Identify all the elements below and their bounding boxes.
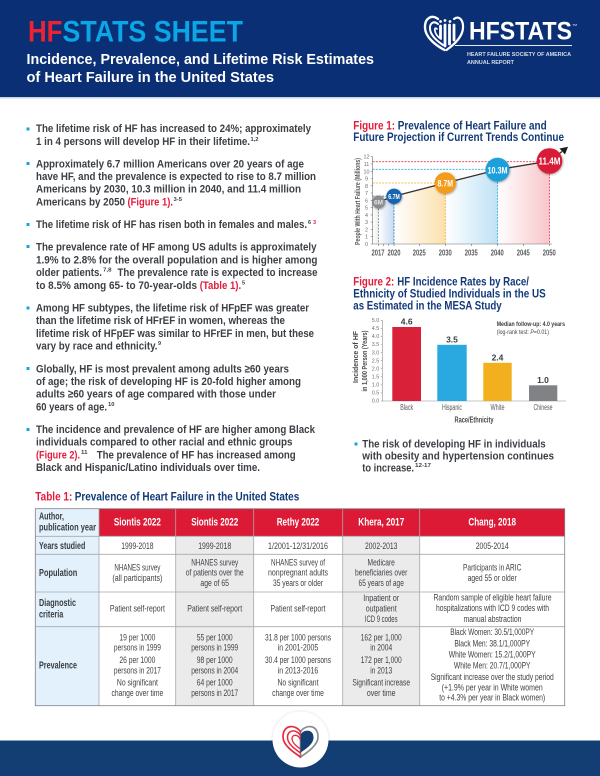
table header row: Rethy 2022 — [277, 517, 319, 529]
row: prevalence: 26 per 1000 — [119, 655, 155, 666]
dashed guide lines — [372, 162, 550, 244]
bullet: Black individuals: (Figure 2). — [36, 449, 80, 461]
bar: Black: 4.6 — [401, 316, 413, 326]
bullet: Black individuals — [26, 424, 316, 474]
table row labels: criteria — [39, 610, 64, 621]
chart note: Median follow-up: 4.0 years — [497, 321, 565, 328]
row: prevalence: 30.4 per 1000 persons — [265, 655, 331, 666]
x axis years: 2050 — [543, 249, 556, 258]
row: prevalence: Black Women: 30.5/1,000PY — [450, 627, 535, 638]
row: years studied: 2002-2013 — [365, 541, 397, 552]
bullet: globally — [26, 363, 301, 413]
row: population: beneficiaries over — [355, 568, 408, 579]
left column bullets — [26, 123, 318, 474]
bullet: lifetime risk: 1 in 4 persons will develop HF in their lifetime. — [36, 136, 250, 148]
logo caption — [467, 52, 571, 66]
bullet: globally: of age; the risk of developing HF is 20-fold higher among — [36, 376, 301, 388]
subtitle — [26, 52, 374, 86]
y axis ticks: 5.0 — [372, 318, 379, 324]
y axis ticks: 4.0 — [372, 334, 379, 340]
row: diagnostic criteria — [110, 593, 552, 625]
bullet: HF subtypes — [26, 303, 314, 352]
row: prevalence: persons in 1999 — [191, 643, 238, 654]
row: diagnostic criteria: Patient self-report — [270, 604, 326, 615]
data point: 2017 — [372, 196, 385, 208]
row: prevalence: White Men: 20.7/1,000PY — [454, 661, 531, 672]
subtitle: Incidence, Prevalence, and Lifetime Risk Estimates — [26, 52, 374, 68]
bullet: globally: Globally, HF is most prevalent among adults ≥60 years — [36, 363, 289, 375]
bullet: females and males: The lifetime risk of HF has risen both in females and males. — [36, 219, 307, 231]
bullet: globally: 10 — [108, 402, 114, 408]
logo caption: ANNUAL REPORT — [467, 60, 515, 66]
bar: Hispanic: 3.5 — [446, 334, 458, 344]
table row labels: publication year — [39, 523, 96, 534]
row: diagnostic criteria: Patient self-report — [110, 604, 165, 615]
bar: White: 2.4 — [492, 353, 504, 363]
row: prevalence — [112, 627, 554, 704]
bullet: prevalence rate: 5 — [242, 280, 245, 286]
y axis ticks: 0 — [365, 242, 368, 248]
y axis ticks: 10 — [364, 169, 370, 175]
table heading: Table 1: — [35, 489, 72, 503]
bar: Chinese: Chinese — [534, 403, 553, 412]
y axis ticks: 4.5 — [372, 326, 379, 332]
row: prevalence: in 2013-2016 — [278, 665, 318, 676]
row: diagnostic criteria: Patient self-report — [187, 604, 242, 615]
icon: logo heart — [425, 17, 463, 50]
y axis ticks: 12 — [364, 155, 370, 161]
bullet: prevalence rate: 1.9% to 2.8% for the overall population and is higher among — [36, 254, 318, 266]
x axis title: Race/Ethnicity — [454, 415, 494, 424]
row: prevalence: White Women: 15.2/1,000PY — [449, 649, 536, 660]
table 1 — [35, 509, 565, 706]
bullet: HF subtypes: lifetime risk of HFpEF was similar to HFrEF in men, but these — [36, 328, 314, 340]
x axis years: 2017 — [372, 249, 384, 258]
y axis ticks: 2.0 — [372, 366, 379, 372]
arrow: trend line — [378, 147, 568, 202]
data point: 2030: 8.7M — [438, 178, 453, 190]
figure 1 heading: Figure 1: — [353, 118, 395, 132]
logo wordmark: HFSTATS — [469, 18, 572, 46]
table row labels: Population — [39, 568, 77, 579]
row: prevalence: persons in 2004 — [191, 665, 239, 676]
x axis years: 2035 — [465, 249, 478, 258]
bar: White: White — [490, 403, 505, 412]
bullet: HF subtypes: vary by race and ethnicity. — [36, 340, 158, 352]
y axis ticks: 0.0 — [372, 399, 379, 405]
row: prevalence: 55 per 1000 — [197, 633, 233, 644]
table row labels: Diagnostic — [39, 598, 76, 609]
row: prevalence: in 2013 — [370, 665, 392, 676]
row: prevalence: 172 per 1,000 — [361, 655, 402, 666]
row: prevalence: persons in 2017 — [191, 688, 238, 699]
y axis ticks: 7 — [365, 191, 368, 197]
bullet: females and males: 3 — [313, 220, 316, 226]
figure 1 chart — [353, 147, 568, 258]
row: population — [112, 557, 521, 589]
bullet: prevalence rate: to 8.5% among 65- to 70-year-olds — [36, 280, 197, 292]
figure 2 bar chart — [351, 316, 566, 424]
row: diagnostic criteria: hospitalizations with ICD 9 codes with — [436, 603, 549, 614]
bullet: Black individuals: 11 — [81, 450, 88, 456]
bullet: 6.7 million: (Figure 1). — [128, 196, 173, 208]
row: years studied: 2005-2014 — [476, 541, 509, 552]
x axis years: 2025 — [413, 249, 426, 258]
row: prevalence: 31.8 per 1000 persons — [265, 633, 331, 644]
bar: Chinese: 1.0 — [537, 375, 549, 385]
row: years studied: 1999-2018 — [121, 541, 154, 552]
bullet: Black individuals: individuals compared to other racial and ethnic groups — [36, 436, 292, 448]
bullet: Black individuals: Black and Hispanic/Latino individuals over time. — [36, 462, 260, 474]
bullet: obesity and hypertension: with obesity and hypertension continues — [361, 450, 554, 462]
row: diagnostic criteria: Random sample of eligible heart failure — [434, 593, 552, 604]
figure 2 heading: HF Incidence Rates by Race/ — [397, 275, 530, 289]
row: population: NHANES survey of — [271, 557, 325, 568]
chart note: (log-rank test: P=0.01) — [497, 329, 549, 336]
data point: 2050 — [537, 148, 562, 174]
bullet: females and males: 6 — [308, 220, 311, 226]
bullet: obesity and hypertension: The risk of developing HF in individuals — [362, 438, 546, 450]
chart area fills — [372, 161, 550, 244]
bar: Black — [392, 316, 421, 412]
chart note — [497, 321, 565, 336]
table row labels: Years studied — [39, 541, 85, 552]
row: prevalence: 98 per 1000 — [197, 655, 233, 666]
axes — [381, 320, 566, 401]
row: population: 35 years or older — [273, 578, 324, 589]
y axis ticks: 6 — [365, 198, 368, 204]
y axis ticks: 9 — [365, 176, 368, 182]
header band — [0, 0, 600, 98]
bullet: Black individuals: The prevalence of HF has increased among — [97, 449, 296, 461]
row: population: nonpregnant adults — [268, 568, 328, 579]
x axis years: 2030 — [439, 249, 452, 258]
y axis ticks: 0.5 — [372, 391, 379, 397]
table grid — [35, 509, 565, 706]
bullet: prevalence rate: The prevalence rate is expected to increase — [118, 267, 318, 279]
table header row: Siontis 2022 — [114, 517, 161, 529]
bar: Hispanic: Hispanic — [442, 403, 462, 412]
footer band — [0, 740, 600, 776]
bullet: 6.7 million — [26, 158, 316, 208]
row: prevalence: Black Men: 38.1/1,000PY — [454, 638, 530, 649]
title: HF — [28, 16, 62, 48]
bar: Black: Black — [400, 403, 414, 412]
bullet: prevalence rate: older patients. — [36, 267, 102, 279]
bullet: lifetime risk: 1,2 — [250, 137, 258, 143]
row: population: NHANES survey — [191, 557, 238, 568]
row: prevalence: 64 per 1000 — [197, 678, 233, 689]
figure 2 heading: as Estimated in the MESA Study — [353, 298, 502, 312]
y axis ticks: 3.0 — [372, 350, 379, 356]
x axis years: 2045 — [517, 249, 530, 258]
figure 2 heading: Ethnicity of Studied Individuals in the US — [353, 286, 546, 300]
bullet: lifetime risk — [26, 123, 312, 148]
logo caption: HEART FAILURE SOCIETY OF AMERICA — [467, 52, 571, 58]
row: diagnostic criteria: Inpatient or — [363, 593, 400, 604]
row: diagnostic criteria: manual abstraction — [464, 614, 522, 625]
row: years studied — [121, 541, 509, 552]
y axis ticks: 1 — [365, 235, 368, 241]
figure 1 heading: Future Projection if Current Trends Continue — [353, 130, 564, 144]
HFStats logo — [425, 17, 577, 66]
row: prevalence: 19 per 1000 — [119, 633, 155, 644]
footer heart badge — [272, 712, 328, 768]
row: diagnostic criteria: outpatient — [366, 604, 397, 614]
y axis ticks: 3 — [365, 220, 368, 226]
row: population: aged 55 or older — [468, 573, 517, 584]
row: diagnostic criteria: ICD 9 codes — [365, 614, 398, 625]
x axis years: 2020 — [388, 249, 401, 258]
table heading: Prevalence of Heart Failure in the United States — [75, 489, 300, 503]
y axis ticks: 4 — [365, 213, 368, 219]
y axis ticks: 8 — [365, 184, 368, 190]
bullet: prevalence rate: The prevalence rate of HF among US adults is approximately — [36, 242, 317, 254]
row: years studied: 1/2001-12/31/2016 — [268, 541, 328, 552]
row: population: Medicare — [368, 557, 395, 568]
figure 2 heading — [353, 275, 546, 312]
row: prevalence: change over time — [112, 688, 163, 699]
y axis ticks — [364, 155, 370, 248]
row: prevalence: to +4.3% per year in Black women) — [439, 693, 545, 704]
table header row — [114, 517, 516, 529]
title: STATS SHEET — [62, 16, 243, 48]
bullet: HF subtypes: than the lifetime risk of HFrEF in women, whereas the — [36, 315, 285, 327]
figure 1 heading: Prevalence of Heart Failure and — [398, 118, 547, 132]
row: prevalence: in 2004 — [370, 643, 393, 654]
bullet: prevalence rate: (Table 1). — [200, 280, 241, 292]
row: prevalence: persons in 2017 — [114, 665, 161, 676]
data point: 2030 — [435, 172, 456, 194]
row: prevalence: in 2001-2005 — [278, 643, 318, 654]
bullet: obesity and hypertension: to increase. — [362, 462, 414, 474]
y axis ticks: 2 — [365, 227, 368, 233]
row: prevalence: persons in 1999 — [114, 643, 161, 654]
y axis ticks — [372, 318, 379, 405]
data point: 2040 — [486, 158, 510, 182]
bullet: 6.7 million: have HF, and the prevalence is expected to rise to 8.7 million — [36, 171, 316, 183]
row: population: of patients over the — [186, 568, 244, 579]
data point: 2050: 11.4M — [538, 157, 560, 168]
figure 1 heading — [353, 118, 564, 144]
row: population: 65 years of age — [359, 578, 404, 589]
subtitle: of Heart Failure in the United States — [26, 70, 274, 86]
x axis years — [372, 249, 556, 258]
row: population: age of 65 — [200, 578, 229, 589]
figure 2 heading: Figure 2: — [353, 275, 394, 289]
y axis ticks: 3.5 — [372, 342, 379, 348]
bullet: obesity and hypertension: 12-17 — [415, 463, 431, 469]
bullet: HF subtypes: Among HF subtypes, the lifetime risk of HFpEF was greater — [36, 303, 310, 315]
bullet: 6.7 million: Americans by 2050 — [36, 196, 125, 208]
row: prevalence: No significant — [278, 678, 319, 689]
bullet: 6.7 million: Approximately 6.7 million Americans over 20 years of age — [36, 158, 304, 170]
row: population: NHANES survey — [114, 562, 161, 573]
row: prevalence: (+1.9% per year in White women — [442, 682, 543, 693]
table header row: Siontis 2022 — [191, 517, 238, 529]
bar: White — [483, 353, 512, 412]
row: prevalence: over time — [367, 688, 396, 699]
y axis label: Incidence of HF — [351, 330, 360, 383]
bullet: globally: 60 years of age. — [36, 401, 107, 413]
bar: Hispanic — [437, 334, 467, 412]
table row labels — [39, 511, 96, 671]
y axis ticks: 1.0 — [372, 383, 379, 389]
table cell fills — [35, 509, 565, 706]
row: population: Participants in ARIC — [463, 562, 521, 574]
bullet: globally: adults ≥60 years of age compared with those under — [36, 389, 277, 401]
data point: 2020: 6.7M — [388, 194, 400, 201]
row: prevalence: Significant increase — [352, 678, 410, 689]
y axis ticks: 2.5 — [372, 358, 379, 364]
y axis ticks: 1.5 — [372, 374, 379, 380]
x axis years: 2040 — [491, 249, 504, 258]
y axis label: in 1,000 Person (Years) — [360, 330, 369, 392]
table row labels: Prevalence — [39, 660, 77, 671]
icon: heart — [283, 727, 318, 757]
y axis label: People With Heart Failure (Millions) — [353, 158, 362, 245]
bullet: Black individuals: The incidence and prevalence of HF are higher among Black — [36, 424, 316, 436]
table header row: Chang, 2018 — [468, 517, 516, 529]
row: prevalence: 162 per 1,000 — [361, 633, 402, 644]
y axis ticks: 11 — [364, 162, 369, 168]
bullet: prevalence rate: 7,8 — [103, 268, 112, 274]
bullet: HF subtypes: 9 — [158, 341, 161, 347]
row: prevalence: change over time — [272, 688, 324, 699]
y axis label — [351, 330, 369, 392]
row: years studied: 1999-2018 — [198, 541, 231, 552]
bullet: lifetime risk: The lifetime risk of HF has increased to 24%; approximately — [36, 123, 312, 135]
data point: 2040: 10.3M — [488, 165, 508, 176]
bar: Chinese — [529, 375, 557, 412]
bullet: 6.7 million: 3-5 — [174, 197, 182, 203]
data point: 2020 — [386, 189, 402, 204]
axes — [371, 157, 552, 246]
table row labels: Author, — [39, 511, 64, 522]
y axis ticks: 5 — [365, 206, 368, 212]
data point: 2017: 6M — [374, 200, 383, 206]
bullet: obesity and hypertension — [354, 438, 554, 474]
HFStats logo: TM — [572, 23, 577, 27]
bullet: 6.7 million: Americans by 2030, 10.3 million in 2040, and 11.4 million — [36, 184, 301, 196]
row: population: (all participants) — [112, 573, 162, 584]
row: prevalence: No significant — [117, 678, 158, 689]
bullet: prevalence rate — [26, 242, 318, 292]
table header row: Khera, 2017 — [358, 517, 404, 529]
